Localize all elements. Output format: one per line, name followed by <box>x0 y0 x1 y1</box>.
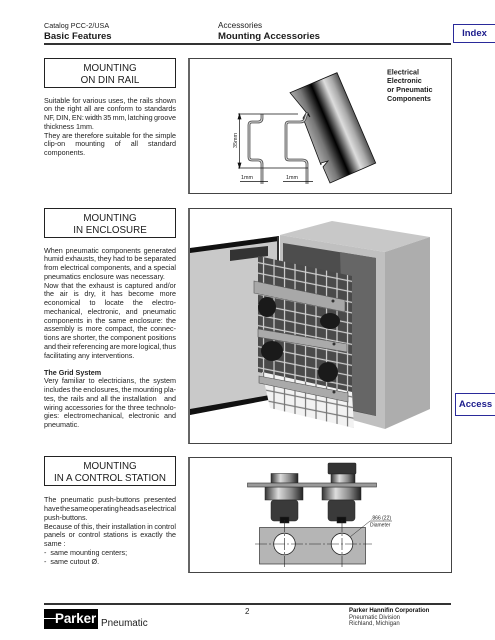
component body <box>290 73 376 183</box>
company address <box>349 608 429 627</box>
dimension labels: 1mm <box>286 175 298 181</box>
dimension labels: 1mm <box>241 175 253 181</box>
din rails in enclosure <box>254 281 348 402</box>
label: electrical components: or Pneumatic <box>387 85 433 94</box>
door <box>190 236 279 415</box>
dimension labels: 35mm <box>233 133 239 148</box>
right button <box>322 463 361 523</box>
heading: mounting in enclosure: MOUNTING <box>83 213 137 224</box>
pneumatic devices <box>258 297 340 382</box>
diameter label: Diameter <box>370 522 391 528</box>
diameter label <box>370 516 391 528</box>
mounting panel edge <box>248 483 376 487</box>
label: electrical components <box>387 68 433 103</box>
din rails <box>249 113 307 184</box>
diagram: din rail <box>233 68 433 184</box>
text: din rail description <box>44 96 176 157</box>
panel: din rail diagram <box>188 58 452 194</box>
diagram: push buttons <box>247 462 392 567</box>
header left: Catalog PCC-2/USA <box>44 21 109 30</box>
enclosure side <box>385 237 430 429</box>
company address: Pneumatic Division <box>349 615 400 621</box>
access button <box>455 393 495 416</box>
heading: mounting in a control station <box>44 456 176 486</box>
dimension lines <box>238 114 313 182</box>
index button <box>453 24 495 43</box>
label: electrical components: Electronic <box>387 76 422 85</box>
heading: mounting on din rail: ON DIN RAIL <box>81 75 139 86</box>
photo: enclosure <box>190 221 430 429</box>
heading: mounting in a control station: MOUNTING <box>83 461 137 472</box>
dimension labels <box>233 133 298 181</box>
index button: Index <box>462 28 487 39</box>
access button: Access <box>459 399 492 410</box>
parker logo: Parker <box>55 611 96 626</box>
text: the grid system <box>44 369 176 429</box>
header left: Basic Features <box>44 31 112 42</box>
page number: 2 <box>245 607 249 616</box>
cutout plate <box>255 520 392 567</box>
label: electrical components: Electrical <box>387 68 419 76</box>
enclosure interior <box>283 243 376 416</box>
heading: mounting on din rail <box>44 58 176 88</box>
panel: control station diagram <box>188 457 452 573</box>
label: electrical components: Components <box>387 94 431 103</box>
wire grid <box>258 256 352 392</box>
header right <box>218 21 320 42</box>
diameter label: .866 (22) <box>371 516 391 522</box>
panel: enclosure photo <box>188 208 452 444</box>
heading: mounting in enclosure <box>44 208 176 238</box>
company address: Parker Hannifin Corporation <box>349 608 429 614</box>
heading: mounting in a control station: IN A CONTROL STATION <box>54 473 166 484</box>
text: control station description <box>44 496 176 566</box>
heading: mounting in enclosure: IN ENCLOSURE <box>73 225 147 236</box>
door label <box>230 246 268 261</box>
pneumatic wordmark: Pneumatic <box>101 618 148 628</box>
enclosure top <box>280 221 430 252</box>
header right: Accessories <box>218 21 262 30</box>
left button <box>265 474 303 523</box>
text: enclosure description <box>44 247 176 360</box>
company address: Richland, Michigan <box>349 621 400 627</box>
header left <box>44 21 112 42</box>
parker logo <box>44 609 98 628</box>
header right: Mounting Accessories <box>218 31 320 42</box>
heading: mounting on din rail: MOUNTING <box>83 63 137 74</box>
enclosure front frame <box>280 235 385 429</box>
